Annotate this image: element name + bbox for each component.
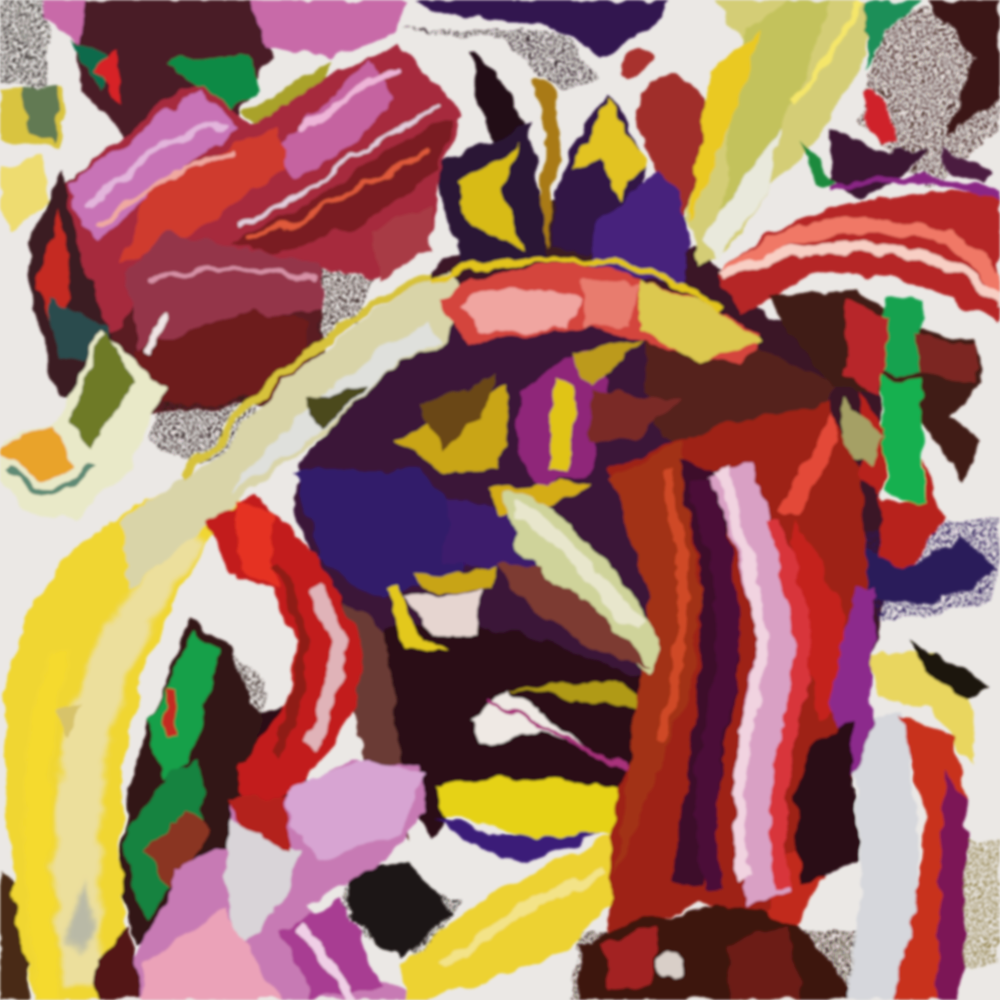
right bottom white and red stripes: [795, 590, 990, 1000]
top right yellow brush stroke: [688, 0, 925, 270]
red and pink arc across centre: [430, 261, 762, 365]
dark underpainting filling gaps: [60, 130, 885, 840]
bottom left pink strokes: [95, 757, 430, 1000]
large yellow arc: [4, 465, 240, 1000]
top centre yellow and purple petals: [432, 55, 688, 285]
right green and red column: [765, 290, 992, 605]
green and dark lower left patch: [0, 620, 452, 1000]
pink streak in vertical stroke: [660, 470, 802, 900]
right red arc: [715, 176, 1000, 325]
pale yellow-green diagonal stroke: [500, 493, 660, 675]
bottom centre dark red splatter: [578, 905, 850, 1000]
red curved stroke: [205, 495, 362, 810]
left pale green-white stroke: [0, 330, 165, 520]
central dark purple mass: [295, 300, 835, 840]
central yellow and violet accents: [385, 340, 680, 862]
bottom yellow stroke: [400, 835, 612, 1000]
pink stroke highlights: [90, 70, 440, 350]
upper left dark patch: [0, 0, 332, 425]
top dark and purple marks: [415, 0, 1000, 222]
upper left pink and red brush strokes: [42, 0, 462, 405]
large red vertical brush stroke: [605, 400, 870, 935]
pale yellow arc shoulder: [120, 268, 470, 590]
